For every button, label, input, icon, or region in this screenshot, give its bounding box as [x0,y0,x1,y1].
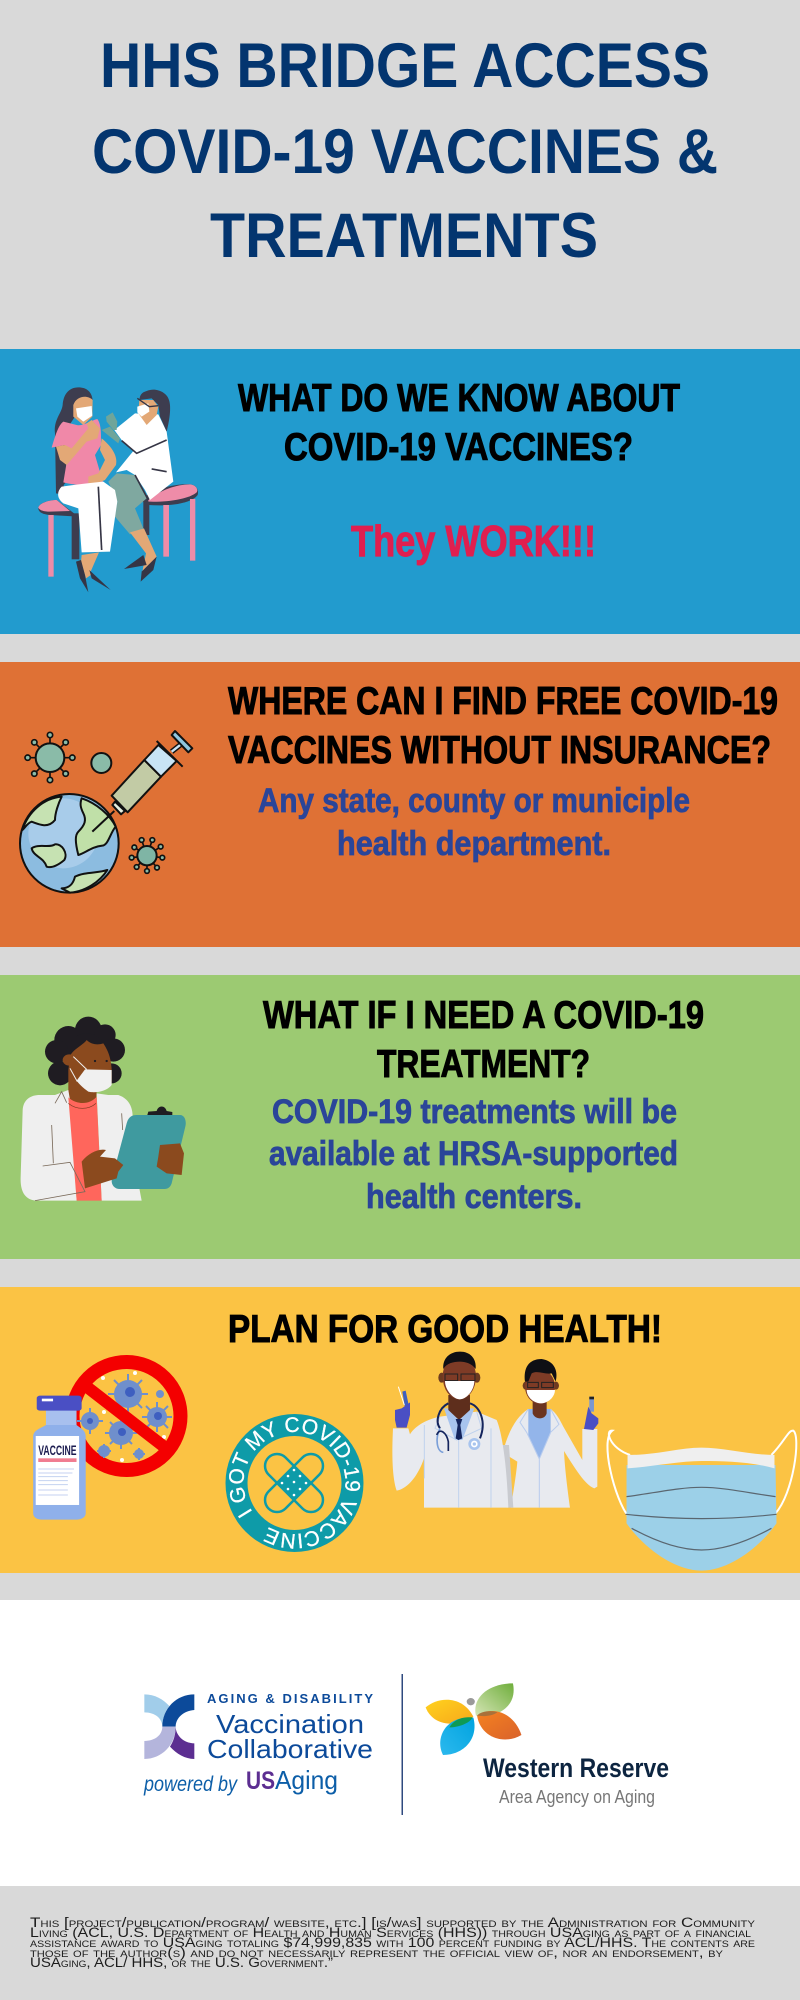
callout: they work: They WORK!!! [351,517,596,566]
answer: HRSA health centers [269,1093,678,1216]
panel: logos [0,1600,800,1886]
footer disclaimer: Living (ACL, U.S. Department of Health and Human Services (HHS)) through USAging as part of a financial [30,1925,751,1940]
title [92,31,718,271]
logo: Western Reserve [426,1683,669,1807]
panel: where can I find [0,662,800,947]
footer disclaimer [30,1915,755,1970]
logo: Aging and Disability Vaccination Collaborative: AGING & DISABILITY [207,1691,373,1706]
answer: HRSA health centers: COVID-19 treatments will be [272,1093,677,1131]
logo: Aging and Disability Vaccination Collaborative: Aging [275,1765,338,1795]
logo: Western Reserve: Area Agency on Aging [499,1787,655,1807]
title: COVID-19 VACCINES & [92,117,718,187]
bandage [260,1449,328,1517]
icon: I got my covid-19 vaccine badge: I GOT MY COVID-19 VACCINE [229,1417,360,1549]
icon: two doctors [392,1352,598,1508]
answer: HRSA health centers: health centers. [366,1178,582,1216]
logo: Aging and Disability Vaccination Collaborative: Collaborative [207,1734,373,1764]
heading: where can I find free vaccines [228,680,778,772]
logo: Aging and Disability Vaccination Collaborative: Vaccination [216,1709,364,1739]
answer: HRSA health centers: available at HRSA-supported [269,1135,678,1173]
footer disclaimer: USAging, ACL/ HHS, or the U.S. Government.” [30,1955,333,1970]
title: TREATMENTS [210,201,598,271]
heading: what do we know about vaccines: COVID-19 VACCINES? [284,426,633,469]
answer: health department [258,782,690,863]
heading: what if I need a treatment: WHAT IF I NEED A COVID-19 [263,994,704,1037]
logo: Aging and Disability Vaccination Collaborative: US [246,1767,275,1795]
icon: health worker with clipboard [21,1017,186,1201]
heading: what if I need a treatment: TREATMENT? [377,1043,590,1086]
heading: what do we know about vaccines: WHAT DO WE KNOW ABOUT [238,377,680,420]
footer disclaimer: those of the author(s) and do not necessarily represent the official view of, nor an endorsement, by [30,1945,723,1960]
heading: plan for good health: PLAN FOR GOOD HEALTH! [228,1308,662,1351]
icon: vaccine vial: VACCINE [38,1443,77,1458]
footer disclaimer: assistance award to USAging totaling $74,999,835 with 100 percent funding by ACL/HHS. The contents are [30,1935,755,1950]
icon: no virus sign [72,1362,180,1470]
title: HHS BRIDGE ACCESS [100,31,710,101]
logo: Aging and Disability Vaccination Collaborative [143,1691,373,1796]
panel: what do we know [0,349,800,634]
icon: nurse vaccinating patient [38,387,198,592]
footer disclaimer: This [project/publication/program/ website, etc.] [is/was] supported by the Administration for Community [30,1915,755,1930]
logo: Western Reserve: Western Reserve [483,1753,669,1783]
panel: what if I need treatment [0,975,800,1259]
icon: vaccine vial [33,1396,86,1520]
answer: health department: Any state, county or municiple [258,782,690,820]
heading: what do we know about vaccines [238,377,680,469]
answer: health department: health department. [337,825,611,863]
divider [402,1674,403,1815]
panel: plan for good health [0,1287,800,1573]
icon: globe with syringe and viruses [20,731,192,893]
logo: Aging and Disability Vaccination Collaborative: powered by [143,1773,238,1796]
heading: what if I need a treatment [263,994,704,1086]
icon: surgical mask [607,1431,796,1571]
